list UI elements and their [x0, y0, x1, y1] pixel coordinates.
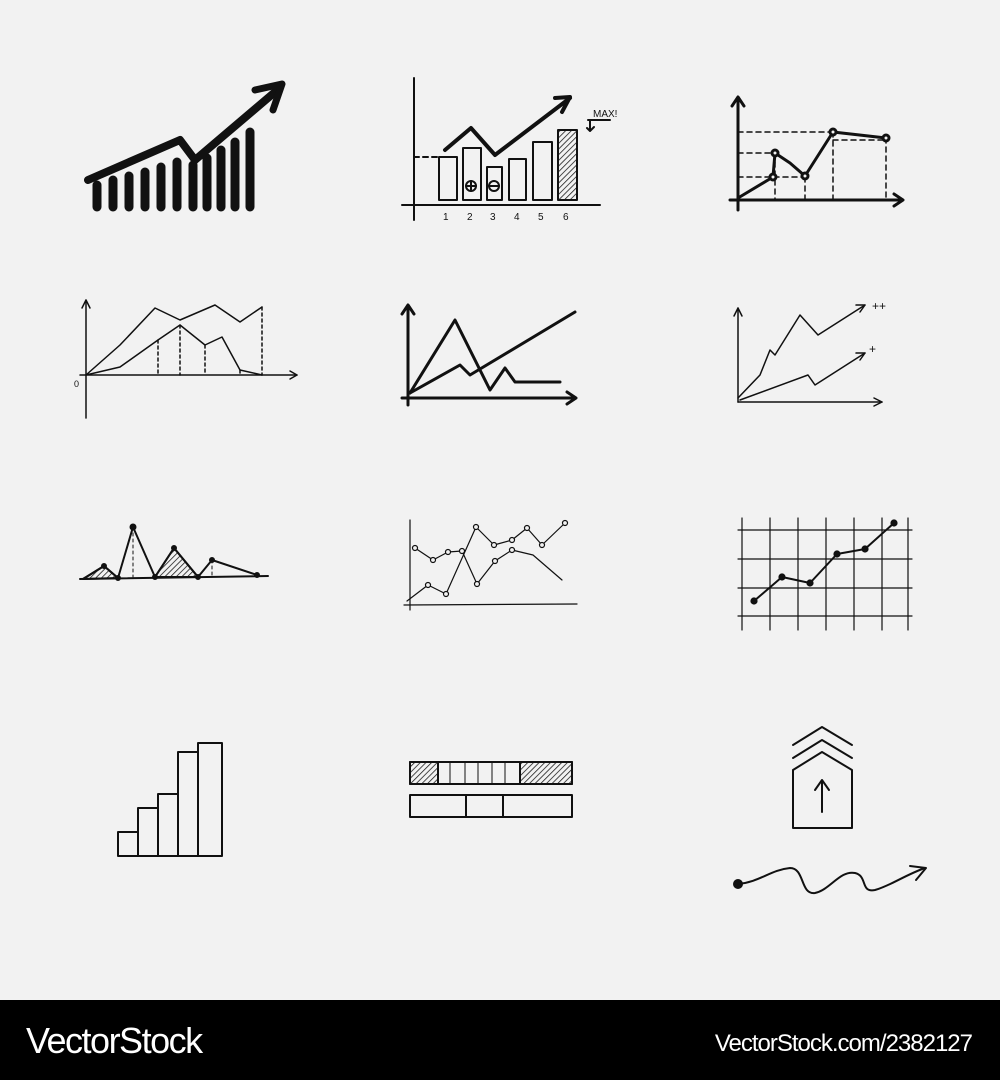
icon: dotted double line chart	[404, 520, 577, 610]
icon: bar chart with max arrow: 5	[538, 212, 544, 223]
icon: two rising arrows: ++	[872, 299, 886, 313]
icon: bar chart with max arrow: 4	[514, 212, 520, 223]
icon: progress bars	[410, 762, 572, 817]
footer url: VectorStock.com/2382127	[715, 1030, 972, 1057]
footer bar	[0, 1000, 1000, 1080]
icon: bar chart with max arrow: 6	[563, 212, 569, 223]
icon: shaded peaks	[80, 524, 268, 580]
icon: double line chart	[74, 300, 297, 418]
icon: growth bars with arrow	[88, 84, 282, 207]
icon: bar chart with max arrow: 3	[490, 212, 496, 223]
icon: bar chart with max arrow: 1	[443, 212, 449, 223]
icon: bold two lines chart	[402, 305, 576, 405]
footer brand: VectorStock	[26, 1020, 202, 1061]
icon: house with up arrow	[793, 727, 852, 828]
icon: double line chart: 0	[74, 379, 79, 389]
icon: bar chart with max arrow: MAX!	[593, 109, 617, 120]
icon: grid line chart	[738, 518, 912, 630]
icon: two rising arrows	[734, 299, 886, 406]
icon: two rising arrows: +	[869, 342, 876, 356]
icon: wavy arrow	[734, 866, 926, 893]
icon: staircase bars	[118, 743, 222, 856]
icon: line chart with dashed guides	[730, 97, 903, 210]
icon: bar chart with max arrow	[402, 78, 617, 223]
icon: bar chart with max arrow: 2	[467, 212, 473, 223]
